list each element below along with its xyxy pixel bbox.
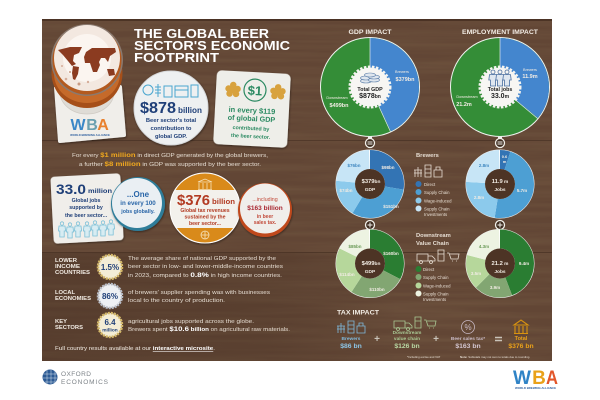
icon: hops (225, 81, 286, 100)
tax item: total: $376 bn (508, 343, 534, 350)
donut chart: brewers jobs: 2.8m (474, 195, 484, 200)
logo: Oxford Economics: OXFORD (61, 371, 91, 378)
icon: bottle cap 86% (98, 284, 122, 308)
footnote (407, 355, 530, 359)
tax item: brewers: $86 bn (340, 343, 362, 350)
badge: $376 billion tax: sustained by the (185, 214, 226, 220)
logo: WBA: A (546, 368, 558, 389)
badge: one in every 100 jobs (111, 177, 165, 231)
tax item: beer sales tax: Beer sales tax* (451, 336, 485, 342)
pie chart: employment impact: 11.9m (522, 74, 538, 80)
operator: equals (495, 338, 502, 340)
donut chart: downstream GDP: $160bn (383, 251, 399, 256)
donut chart: downstream jobs (466, 230, 534, 298)
title: SECTOR'S ECONOMIC (134, 38, 291, 53)
pie chart: employment impact: Brewers (523, 68, 537, 72)
icon: people (58, 220, 115, 238)
donut chart: brewers jobs: 11.9 m (492, 179, 508, 185)
operator: plus: + (374, 334, 380, 345)
pie chart: employment impact: Downstream (456, 95, 478, 99)
tax item: beer sales tax: $163 bn (455, 343, 481, 350)
legend: brewers (414, 153, 452, 217)
badge: $878 billion GDP (134, 71, 208, 145)
badge: $878 billion GDP: $878 (140, 100, 176, 117)
donut chart: brewers jobs: 0.6 (502, 154, 508, 159)
coaster and beer glass with world map (51, 24, 126, 143)
legend: downstream value chain: Supply Chain (423, 275, 449, 280)
row: lower income countries (55, 255, 283, 279)
pie chart: GDP impact: Brewers (395, 70, 409, 74)
badge: total jobs (480, 67, 520, 107)
card: 33.0 million jobs: 33.0 (56, 182, 86, 197)
badge: $376 billion tax (170, 173, 240, 243)
panel: wood background (42, 19, 552, 361)
icon: hop (201, 231, 209, 239)
badge: total GDP (350, 67, 390, 107)
badge: total GDP: Total GDP (357, 87, 383, 93)
donut chart: downstream GDP: $114bn (339, 272, 355, 277)
tax item: brewers (337, 321, 365, 350)
heading: tax impact: TAX IMPACT (337, 310, 379, 316)
pie chart: employment impact: 21.2m (456, 102, 472, 108)
icon: bottle cap 6.4 million: million (102, 328, 118, 334)
donut chart: downstream jobs: Jobs (494, 269, 506, 275)
icon: delivery and retail (394, 317, 436, 330)
donut chart: downstream jobs: 3.5m (471, 271, 481, 276)
donut chart: downstream jobs: 21.2 m (492, 261, 508, 267)
legend: brewers: Brewers (416, 153, 439, 159)
legend: downstream value chain: Investments (423, 297, 446, 302)
badge: $163 billion sales tax: $163 billion (247, 205, 283, 212)
badge: $376 billion tax: beer sector... (189, 221, 222, 227)
donut chart: downstream GDP (336, 230, 404, 298)
row: lower income countries: The average share of national GDP supported by the (128, 256, 276, 262)
pie chart: GDP impact: $499bn (330, 103, 349, 109)
icon: delivery and retail (417, 250, 459, 264)
donut chart: brewers GDP (336, 150, 404, 218)
title: THE GLOBAL BEER (134, 26, 270, 41)
card: $1 in every $119: of global GDP (228, 113, 276, 124)
connector: plus GDP (366, 220, 374, 233)
donut chart: downstream jobs: 9.4m (519, 261, 529, 266)
tax item: total (508, 320, 534, 350)
WBA logo on coaster: WORLD BREWING ALLIANCE (70, 133, 110, 137)
row: local economies: local to the country of production. (128, 298, 225, 304)
badge: total jobs: Total jobs (488, 87, 512, 93)
legend: downstream value chain: Value Chain (416, 241, 449, 247)
operator: plus: + (433, 334, 439, 345)
badge: $878 billion GDP: Beer sector's total (146, 118, 197, 124)
badge: total GDP: $878bn (359, 93, 381, 100)
legend: downstream value chain (416, 233, 459, 302)
row: local economies: of brewers' supplier spending was with businesses (128, 290, 270, 296)
icon: globe (42, 370, 58, 384)
donut chart: brewers jobs: 5.7m (517, 188, 527, 193)
footnote: *Including excise and VAT (407, 355, 441, 359)
legend: brewers: Supply Chain (424, 190, 450, 195)
badge: $878 billion GDP: billion (178, 106, 202, 115)
donut chart: brewers jobs: 2.8m (479, 163, 489, 168)
badge: $163 billion sales tax: in beer (257, 214, 273, 220)
donut chart: downstream jobs: 3.9m (490, 285, 500, 290)
donut chart: brewers GDP: $98bn (381, 165, 395, 170)
title: FOOTPRINT (134, 50, 219, 65)
icon: bottle cap 1.5% (98, 255, 122, 279)
WBA logo on coaster (70, 117, 110, 137)
icon: bottle cap 86%: 86% (102, 292, 118, 301)
heading: employment impact: EMPLOYMENT IMPACT (462, 29, 538, 36)
badge: $376 billion tax: Global tax revenues (180, 208, 230, 214)
connector: plus jobs (496, 220, 504, 233)
card: 33.0 million jobs (50, 173, 124, 244)
pie chart: employment impact (450, 38, 550, 136)
legend: downstream value chain: Supply Chain (423, 292, 449, 296)
donut chart: brewers jobs (466, 150, 534, 218)
connector: equals jobs (496, 136, 504, 148)
icon: bottle cap 1.5%: 1.5% (101, 263, 119, 272)
row: key sectors: KEY (55, 319, 68, 325)
row: key sectors: Brewers spent $10.6 billion on agricultural raw materials. (128, 326, 290, 333)
card: 33.0 million jobs: the beer sector... (65, 213, 108, 219)
card: 33.0 million jobs: supported by (69, 205, 103, 211)
badge: one in every 100 jobs: in every 100 (120, 200, 156, 207)
logo: WBA: W (513, 368, 531, 389)
WBA logo on coaster: W (70, 117, 86, 134)
connector: equals GDP (366, 136, 374, 148)
logo: WBA: B (532, 368, 546, 389)
donut chart: brewers GDP: $74bn (339, 188, 353, 193)
icon: percent: % (464, 323, 472, 332)
icon: bottle cap 6.4 million (98, 313, 122, 337)
row: local economies: LOCAL (55, 290, 75, 296)
icons row (143, 84, 198, 97)
row: lower income countries: beer sector in low- and lower-middle-income countries (128, 264, 283, 270)
legend: brewers: Direct (424, 182, 436, 187)
badge: $376 billion tax: $376 (177, 193, 210, 209)
badge: one in every 100 jobs: ...One (127, 190, 150, 199)
badge: $376 billion tax: billion (212, 197, 235, 206)
tax item: total: Total (515, 336, 528, 342)
donut chart: brewers GDP: $151bn (383, 204, 399, 209)
icon: bottle cap 6.4 million: 6.4 (104, 318, 116, 327)
row: key sectors: agricultural jobs supported across the globe. (128, 319, 254, 325)
legend: brewers: Investments (424, 212, 447, 217)
tax item: downstream value chain (393, 317, 436, 350)
row: key sectors (55, 313, 290, 337)
text: $1 million direct GDP: For every $1 million in direct GDP generated by the global brewers, (72, 152, 268, 159)
donut chart: downstream GDP: $85bn (348, 244, 362, 249)
text: $1 million direct GDP: a further $8 million in GDP was supported by the beer sector. (79, 161, 262, 168)
badge: $878 billion GDP: global GDP. (155, 134, 187, 140)
donut chart: downstream GDP: GDP (365, 269, 376, 275)
footnote: Note: Subtotals may not sum to totals due to rounding. (460, 355, 530, 359)
WBA logo on coaster: B (86, 117, 98, 134)
row: lower income countries: in 2023, compared to 0.8% in high income countries. (128, 272, 282, 279)
donut chart: brewers jobs: m (503, 159, 507, 164)
legend: downstream value chain: Direct (423, 267, 435, 272)
badge: total jobs: 33.0m (491, 93, 510, 100)
tax item: downstream value chain: value chain (394, 336, 420, 342)
card: $1 in every $119: the beer sector. (231, 133, 271, 141)
pie chart: GDP impact (320, 38, 420, 136)
logo: WBA (513, 368, 558, 390)
badge: $163 billion sales tax: sales tax. (254, 220, 277, 226)
world map in foam (58, 47, 116, 80)
donut chart: brewers GDP: $379bn (362, 179, 380, 185)
text: full country results: Full country results available at our interactive microsite . (55, 346, 215, 352)
tax item: downstream value chain: Downstream (393, 330, 421, 336)
card: 33.0 million jobs: Global jobs (72, 198, 100, 204)
pie chart: GDP impact: Downstream (326, 96, 348, 100)
icon: brewery (337, 321, 365, 333)
logo: Oxford Economics (42, 370, 109, 386)
row: local economies (55, 284, 270, 308)
card: $1 in every $119 (213, 70, 291, 148)
donut chart: downstream GDP: $110bn (369, 287, 385, 292)
donut chart: brewers jobs: Jobs (494, 187, 506, 193)
donut chart: downstream jobs: 4.3m (479, 244, 489, 249)
legend: downstream value chain: Downstream (416, 233, 451, 239)
icon: dollar coin: $1 (247, 83, 263, 98)
icon: bank (514, 320, 528, 334)
card: $1 in every $119: contributed by (232, 125, 270, 133)
row: lower income countries: LOWER (55, 258, 77, 264)
badge: $878 billion GDP: contribution to (151, 126, 192, 132)
badge: $163 billion sales tax: ...including (252, 197, 278, 203)
donut chart: brewers GDP: $76bn (347, 163, 361, 168)
card: 33.0 million jobs: million (88, 188, 112, 195)
tax item: beer sales tax (451, 320, 485, 350)
donut chart: downstream GDP: $499bn (362, 261, 380, 267)
heading: GDP impact: GDP IMPACT (348, 29, 392, 36)
pie chart: GDP impact: $379bn (396, 77, 415, 83)
text: $1 million direct GDP (72, 152, 268, 168)
badge: $163 billion sales tax (238, 183, 292, 237)
icon: bank (198, 179, 212, 190)
badge: one in every 100 jobs: jobs globally. (120, 209, 155, 215)
donut chart: brewers GDP: GDP (365, 187, 376, 193)
tax item: downstream value chain: $126 bn (394, 343, 420, 350)
row: key sectors: SECTORS (55, 325, 84, 331)
row: lower income countries: COUNTRIES (55, 270, 91, 276)
row: lower income countries: INCOME (55, 264, 81, 270)
legend: brewers: Wage-induced (424, 198, 452, 204)
WBA logo on coaster: A (97, 117, 109, 134)
card: $1 in every $119: in every $119 (228, 105, 275, 116)
logo: Oxford Economics: ECONOMICS (61, 379, 109, 386)
legend: brewers: Supply Chain (424, 206, 450, 212)
tax item: brewers: Brewers (342, 336, 361, 342)
logo: WBA: WORLD BREWING ALLIANCE (515, 386, 556, 390)
row: local economies: ECONOMIES (55, 296, 92, 302)
icon: brewery (414, 165, 442, 177)
legend: downstream value chain: Wage-induced (423, 284, 451, 288)
title (134, 26, 291, 65)
